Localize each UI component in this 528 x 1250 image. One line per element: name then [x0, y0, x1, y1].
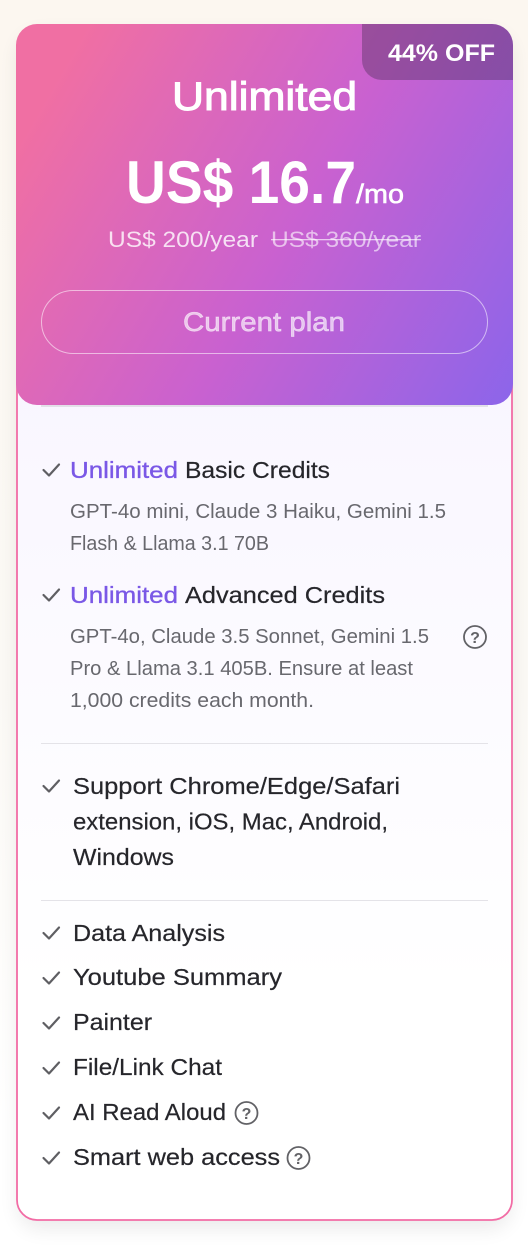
icon: help for advanced credits — [464, 626, 486, 648]
feature: unlimited advanced credits: Unlimited — [70, 582, 178, 608]
feature: data analysis: Data Analysis — [73, 920, 225, 946]
feature: unlimited basic credits — [44, 457, 446, 555]
feature: ai read aloud: AI Read Aloud — [73, 1099, 226, 1125]
panel: plan card body — [17, 300, 512, 1220]
feature: unlimited basic credits: Basic Credits — [185, 457, 330, 483]
feature: unlimited advanced credits: Pro & Llama 3.1 405B. Ensure at least — [70, 658, 413, 680]
button: current plan — [42, 290, 488, 354]
button: current plan: Current plan — [183, 307, 345, 337]
feature: platform support: extension, iOS, Mac, Android, — [73, 808, 388, 834]
feature: unlimited advanced credits: GPT-4o, Claude 3.5 Sonnet, Gemini 1.5 — [70, 626, 429, 648]
feature: smart web access: Smart web access — [73, 1144, 280, 1170]
yearly price: US$ 360/year — [271, 227, 421, 252]
feature: unlimited basic credits: Unlimited — [70, 457, 178, 483]
yearly price: US$ 200/year — [108, 227, 258, 252]
icon: help for advanced credits: ? — [470, 630, 480, 647]
price: US$ 16.7 — [126, 149, 356, 216]
feature: file and link chat: File/Link Chat — [73, 1054, 222, 1080]
feature: smart web access: ? — [294, 1151, 303, 1168]
badge: discount — [362, 24, 513, 80]
list: other features — [44, 920, 310, 1170]
price: /mo — [356, 179, 404, 209]
feature: unlimited advanced credits: Advanced Credits — [185, 582, 385, 608]
feature: ai read aloud: ? — [242, 1106, 251, 1123]
yearly price — [108, 227, 421, 252]
feature: painter — [44, 1009, 152, 1035]
panel: gradient header — [16, 24, 513, 405]
group: credits — [44, 457, 486, 712]
feature: unlimited basic credits: GPT-4o mini, Claude 3 Haiku, Gemini 1.5 — [70, 501, 446, 523]
feature: unlimited advanced credits: 1,000 credits each month. — [70, 690, 314, 712]
heading: plan name: Unlimited — [172, 75, 357, 119]
feature: platform support: Windows — [73, 844, 174, 870]
feature: painter: Painter — [73, 1009, 152, 1035]
feature: unlimited advanced credits — [44, 582, 429, 712]
feature: platform support: Support Chrome/Edge/Safari — [73, 773, 400, 799]
badge: discount: 44% OFF — [388, 40, 495, 67]
feature: unlimited basic credits: Flash & Llama 3.1 70B — [70, 533, 269, 555]
feature: youtube summary: Youtube Summary — [73, 964, 282, 990]
feature: platform support — [44, 773, 400, 870]
